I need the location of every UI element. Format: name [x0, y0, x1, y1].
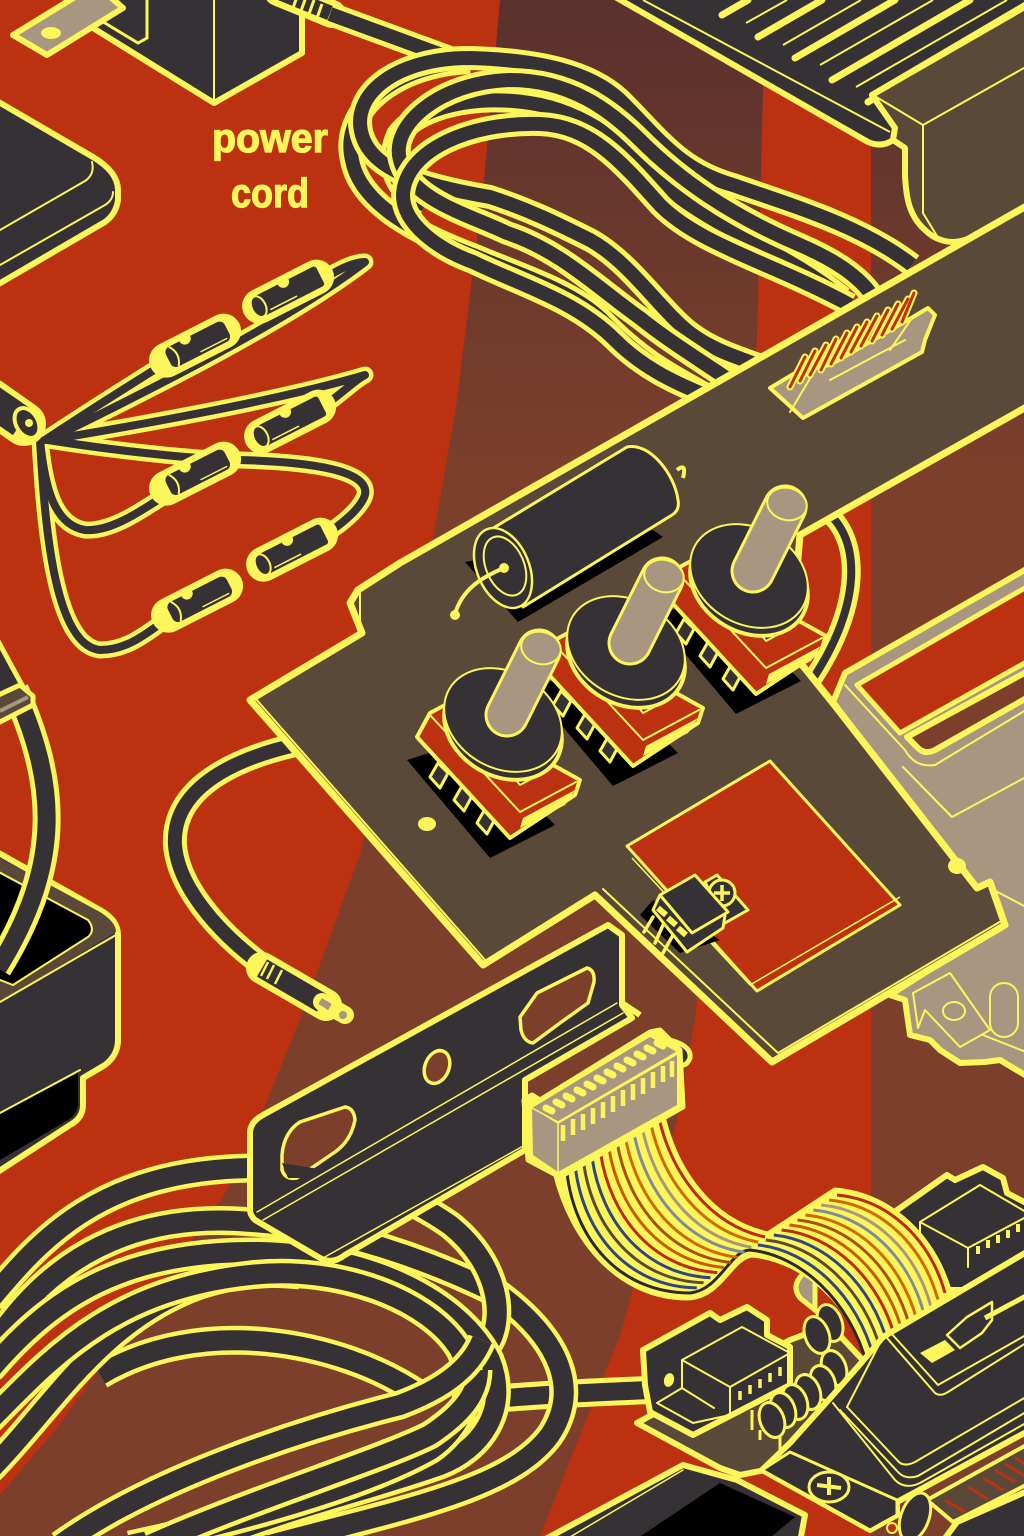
label: power cord: cord — [231, 170, 309, 216]
rotary switch 3 — [653, 483, 827, 714]
label: power cord — [212, 115, 328, 216]
screw plate — [762, 1452, 897, 1530]
connector: wire terminal 2 — [245, 260, 325, 320]
small transistor chip — [640, 875, 748, 953]
hole left — [282, 1107, 355, 1178]
row of small capacitors — [752, 1301, 851, 1450]
ribbon cable — [555, 1112, 950, 1368]
slider bar — [920, 1340, 955, 1363]
cable: mini jack — [175, 745, 347, 1019]
left d-sub connector — [643, 1307, 790, 1435]
bottom dark plate — [540, 1465, 805, 1536]
connector: wire terminal 4 — [159, 442, 232, 498]
hole center — [420, 1047, 454, 1087]
illustration: heat sink device top right — [610, 0, 1024, 242]
connector: wire terminal 6 — [161, 569, 234, 625]
wires: branching wire harness — [0, 262, 365, 650]
pin header connector — [770, 293, 935, 418]
electronics module: rear parts — [540, 1167, 1024, 1536]
capacitor cylinder — [450, 446, 684, 622]
illustration: top left dark box — [0, 97, 118, 289]
tan tab behind — [796, 1272, 815, 1310]
background: brown light beam — [0, 0, 765, 1536]
connector: wire terminal 5 — [249, 518, 329, 578]
connector: wire terminal 1 — [159, 314, 232, 370]
metal bracket — [250, 925, 640, 1261]
hole right — [520, 968, 594, 1043]
red daughter board — [627, 761, 900, 991]
circuit board panel — [250, 204, 1024, 1062]
cable through hole — [282, 1163, 325, 1178]
upper d-sub connector — [893, 1167, 1024, 1290]
rotary switch 1 — [407, 627, 581, 858]
pcb base — [637, 1325, 900, 1480]
cable: loop behind switches — [805, 505, 851, 690]
hole right — [948, 858, 966, 874]
illustration: tan housing right — [833, 567, 1024, 1078]
screw — [809, 1472, 849, 1502]
rotary switch 2 — [530, 555, 704, 786]
label: power cord: power — [212, 115, 328, 161]
illustration: bottom left tray box — [0, 630, 118, 1177]
connector: wire terminal 3 — [247, 390, 327, 450]
cable: power cord coil — [330, 14, 912, 398]
cable: big bottom-left bundle — [0, 1168, 650, 1536]
hole left — [418, 817, 436, 831]
electronics module: main chip housing — [762, 1250, 1024, 1530]
illustration: power adapter plug — [13, 0, 332, 103]
slider switch — [947, 1302, 992, 1348]
lower right stripes — [887, 1443, 1024, 1536]
background: right brown column — [871, 0, 1024, 1536]
ribbon header connector — [524, 1030, 690, 1177]
